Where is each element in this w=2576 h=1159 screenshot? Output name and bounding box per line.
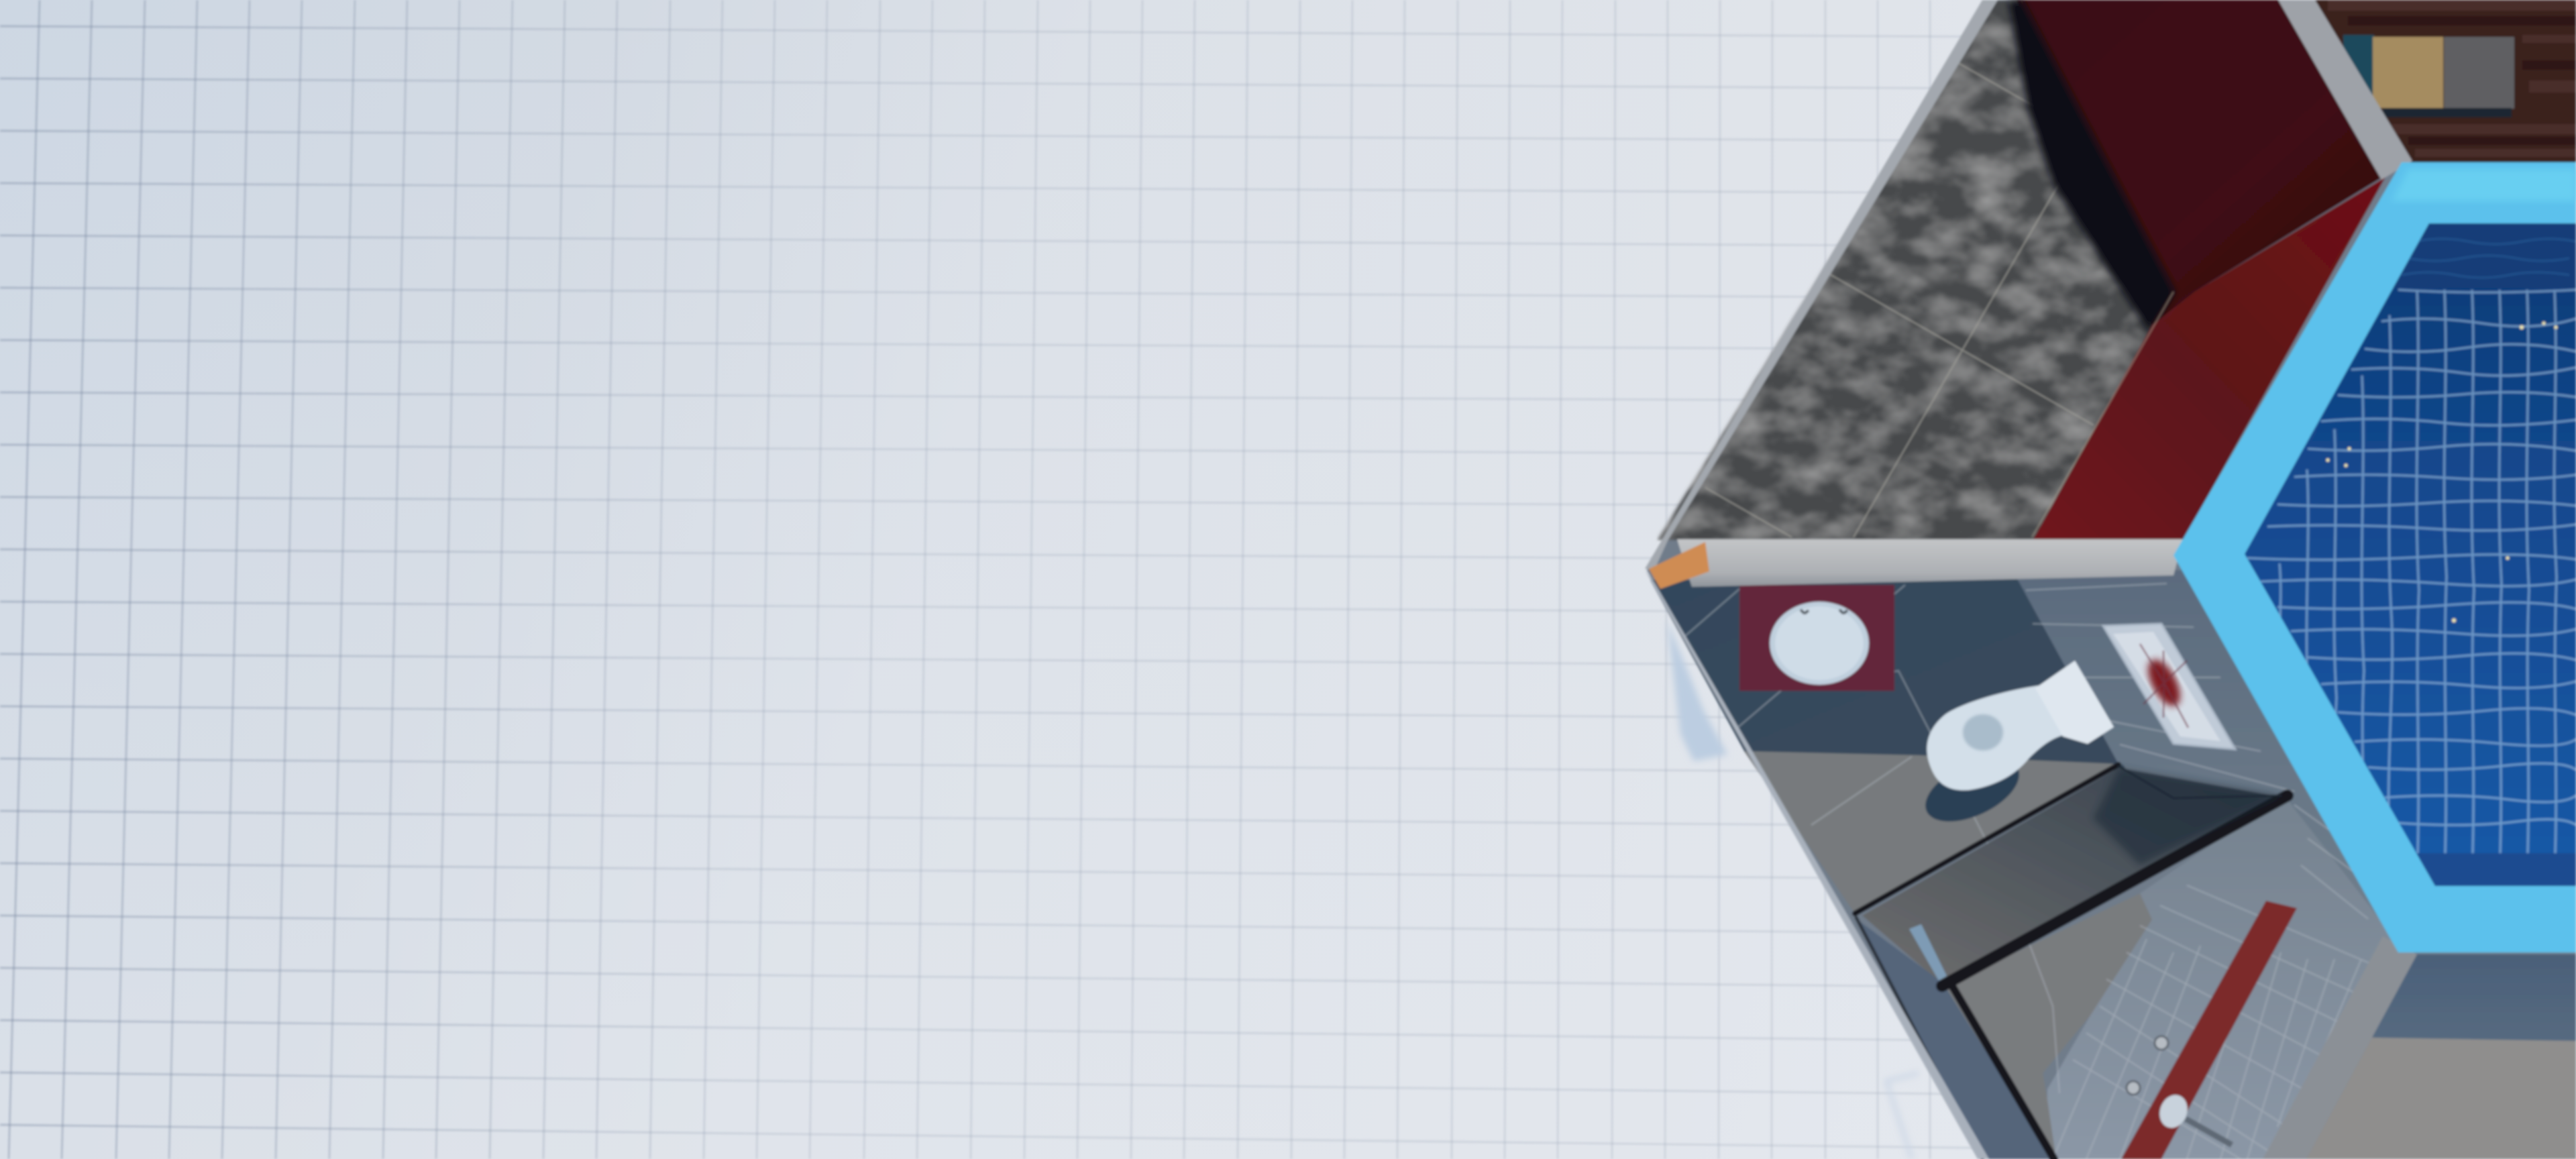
outside lower right: blue shadowed wall xyxy=(2372,954,2576,1041)
bedding: folded colored blocks xyxy=(2343,35,2514,117)
grey wall lower right xyxy=(2263,936,2417,1159)
shower tiled floor xyxy=(2046,795,2395,1159)
shower corner shadow xyxy=(2093,768,2281,865)
red floor skirting line xyxy=(2032,292,2174,537)
floor tile grid xyxy=(0,0,2012,1159)
stone tile joints xyxy=(1705,61,2094,537)
basin xyxy=(1770,602,1869,685)
knob upper xyxy=(2155,1036,2168,1050)
room: dark wood floor top right xyxy=(2308,0,2576,162)
bathroom tile joints xyxy=(1684,584,2392,1159)
pool tile lines xyxy=(2247,290,2576,853)
toilet bowl xyxy=(1927,685,2065,790)
deep water band top xyxy=(2395,225,2575,289)
outside lower right: pale grey floor xyxy=(2306,1038,2576,1159)
shower glass highlight xyxy=(1909,924,1947,981)
vanity: maroon counter and round basin xyxy=(1739,585,1894,691)
maroon counter xyxy=(1739,585,1894,691)
building: all rooms seen from above xyxy=(1645,0,2576,1159)
pool rim highlight xyxy=(2392,169,2576,201)
dark red wall panel xyxy=(2017,0,2383,325)
shower glass panel xyxy=(1862,768,2284,982)
bright red floor xyxy=(2033,177,2385,541)
grey partition wall upper right xyxy=(2278,0,2412,180)
bathroom: floor and walls xyxy=(1650,570,2395,1159)
wall art tile with red flower xyxy=(2103,624,2235,749)
block shadow xyxy=(2383,108,2512,117)
water sparkles xyxy=(2326,322,2557,622)
toilet tank xyxy=(2035,661,2114,744)
grey partition wall upper left xyxy=(1645,0,1998,570)
toilet seat inner xyxy=(1963,714,2003,751)
pool rim xyxy=(2174,162,2576,952)
shower side glass xyxy=(1856,919,2053,1159)
outside shadow beside bathroom wall xyxy=(1667,620,1919,1159)
shower concrete section xyxy=(1945,893,2152,1159)
shower black frames xyxy=(1855,765,2288,1159)
wall shadow band xyxy=(2008,0,2175,333)
pool water xyxy=(2241,221,2576,892)
tiled wall xyxy=(2012,570,2395,1006)
horizontal concrete wall xyxy=(1677,539,2183,587)
tan block xyxy=(2373,37,2443,108)
toilet shadow xyxy=(1916,746,2029,834)
shower head xyxy=(2155,1091,2192,1132)
orange brick wall end xyxy=(1649,542,1709,589)
toilet xyxy=(1927,661,2114,790)
building base slab xyxy=(1647,0,2576,1159)
shower pipe xyxy=(2186,1119,2232,1145)
knob lower xyxy=(2127,1081,2140,1095)
shower fixtures xyxy=(2127,1036,2232,1145)
taps xyxy=(1801,610,1847,614)
slate shadowed floor xyxy=(1650,577,2127,771)
gray block xyxy=(2444,37,2514,109)
teal block xyxy=(2343,35,2374,107)
deep water band bottom xyxy=(2411,853,2576,886)
bathroom outer wall left xyxy=(1645,570,1989,1159)
dark stone floor xyxy=(1657,0,2187,541)
red shower stripe xyxy=(2121,901,2297,1159)
concrete floor xyxy=(1744,751,2118,916)
